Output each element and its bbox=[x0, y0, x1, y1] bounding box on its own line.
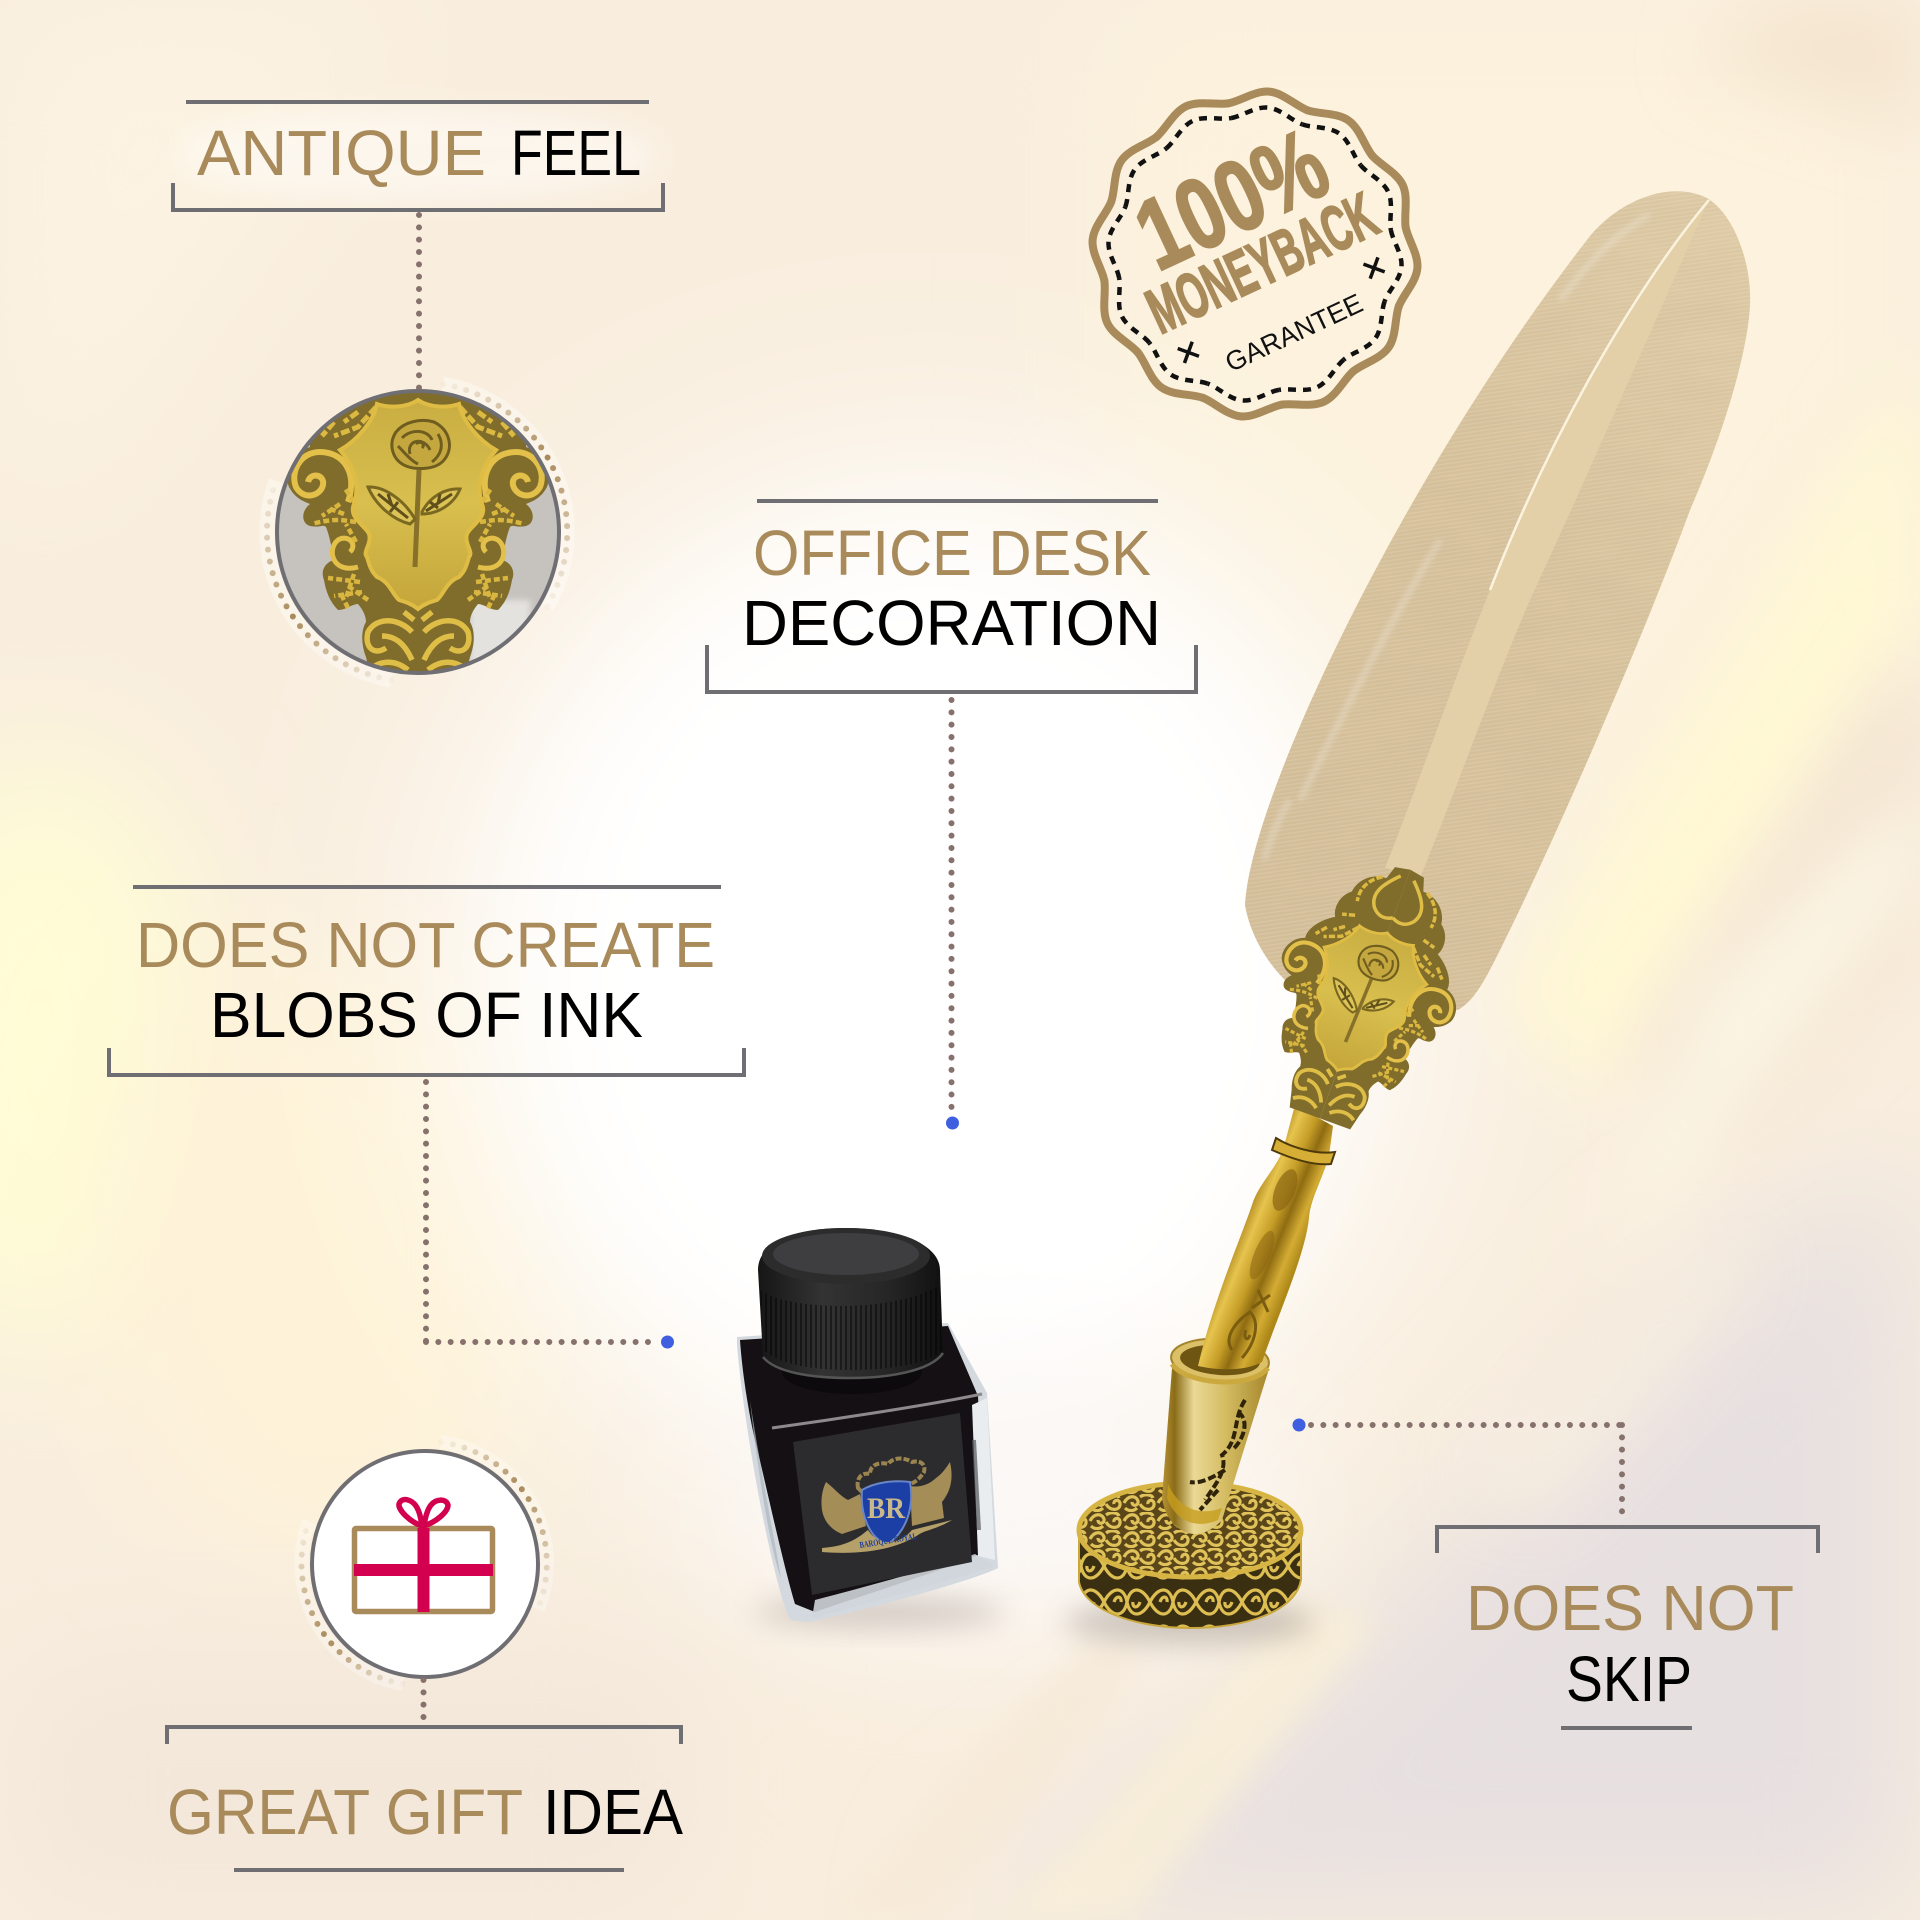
connector: office desk to bottle bbox=[946, 700, 959, 1130]
icon: gift box bbox=[354, 1500, 493, 1612]
money-back guarantee stamp: 100% bbox=[1119, 108, 1344, 292]
product: pen shaft bbox=[1172, 838, 1496, 1382]
glass body bbox=[737, 1323, 998, 1622]
heading panel: does not create blobs of ink bbox=[109, 885, 744, 1075]
heading panel: office desk decoration: OFFICE DESK bbox=[753, 517, 1151, 589]
bottle logo: BAROQUE ROYAL bbox=[859, 1531, 918, 1550]
heading panel: great gift idea: IDEA bbox=[543, 1776, 683, 1848]
medallion: rose ornament close-up bbox=[260, 377, 574, 687]
connector: blobs of ink to bottle bbox=[426, 1082, 674, 1348]
dark ink bbox=[740, 1326, 985, 1612]
heading panel: antique feel bbox=[173, 100, 663, 210]
feather vane bbox=[1245, 191, 1750, 1010]
heading panel: does not create blobs of ink: BLOBS OF INK bbox=[210, 979, 643, 1051]
left face reflections bbox=[750, 1400, 781, 1578]
bottle logo: BR bbox=[867, 1492, 905, 1525]
heading panel: does not create blobs of ink: DOES NOT CREATE bbox=[136, 909, 715, 981]
heading panel: great gift idea bbox=[167, 1727, 683, 1872]
heading panel: office desk decoration bbox=[707, 499, 1196, 692]
shoulder highlight bbox=[772, 1394, 982, 1428]
cap bbox=[758, 1228, 943, 1378]
product: ink bottle bbox=[737, 1228, 1005, 1628]
heading panel: does not skip: SKIP bbox=[1566, 1643, 1692, 1715]
heading panel: antique feel: ANTIQUE bbox=[197, 117, 486, 189]
feather rachis bbox=[1385, 200, 1709, 878]
collar bbox=[782, 1350, 922, 1394]
ornate rose finial bbox=[1234, 838, 1496, 1150]
heading panel: great gift idea: GREAT GIFT bbox=[167, 1776, 523, 1848]
money-back guarantee stamp bbox=[1078, 77, 1432, 431]
label bbox=[793, 1413, 972, 1595]
base glass highlight bbox=[812, 1554, 994, 1618]
product: pen stand bbox=[1065, 1336, 1315, 1644]
money-back guarantee stamp: MONEYBACK bbox=[1136, 179, 1388, 347]
bottle logo bbox=[821, 1458, 952, 1553]
right glass highlight bbox=[972, 1398, 995, 1560]
heading panel: does not skip: DOES NOT bbox=[1466, 1572, 1794, 1644]
product: feather bbox=[1245, 191, 1750, 1010]
heading panel: office desk decoration: DECORATION bbox=[742, 587, 1161, 659]
stand cup bbox=[1162, 1336, 1270, 1534]
heading panel: does not skip bbox=[1437, 1527, 1818, 1730]
money-back guarantee stamp: GARANTEE bbox=[1221, 288, 1367, 378]
connector: antique feel to medallion bbox=[416, 215, 422, 392]
heading panel: antique feel: FEEL bbox=[511, 117, 641, 189]
medallion: gift icon bbox=[301, 1442, 547, 1684]
connector: gift medallion to heading bbox=[420, 1680, 426, 1717]
connector: does not skip to stand bbox=[1292, 1418, 1622, 1520]
stand base bbox=[1079, 1483, 1301, 1628]
